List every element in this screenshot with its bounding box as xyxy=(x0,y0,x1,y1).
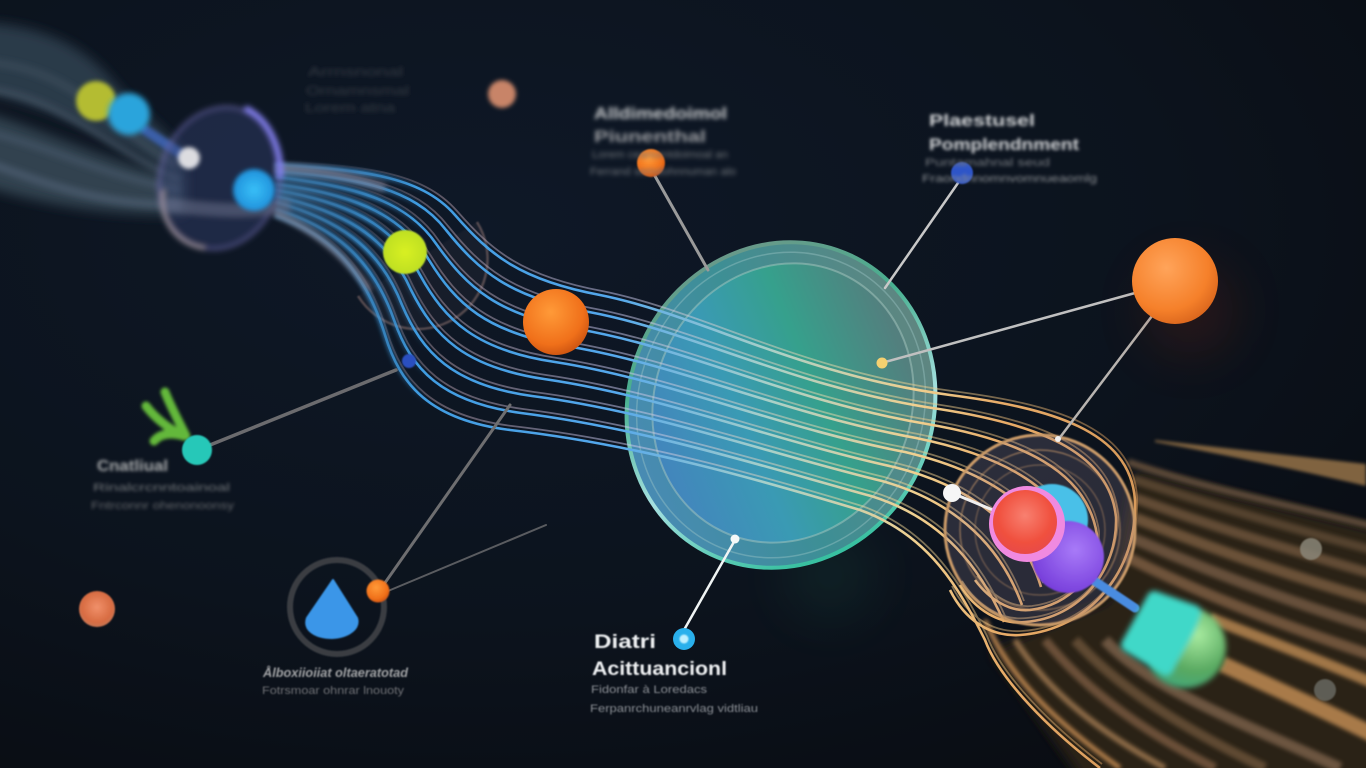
node: blue top right xyxy=(951,162,973,184)
flow strands xyxy=(275,161,1137,768)
text block: bottom label: Acittuancionl xyxy=(592,659,727,680)
text block: top centre label: Piunenthal xyxy=(594,127,706,146)
node: blue on bubble xyxy=(233,169,275,211)
text block: left label: Fntrconnr ohenonoonsy xyxy=(91,500,235,512)
text block: top right label: Puntamahnal seud xyxy=(925,157,1050,169)
blur over strands near the left bubble xyxy=(275,168,385,290)
text block: faint top left label: Arrnsnonal xyxy=(308,64,403,79)
text block: lower left label: Fotrsmoar ohnrar lnouoty xyxy=(262,685,405,697)
text block: top right label xyxy=(922,111,1097,185)
node: blurred yellow xyxy=(76,81,116,121)
node: blurred blue xyxy=(108,93,150,135)
text block: bottom label xyxy=(590,632,758,715)
cluster: spheres xyxy=(989,484,1104,593)
text block: left label: Rinalcrcnntoainoal xyxy=(93,482,230,494)
text block: bottom label: Diatri xyxy=(594,632,656,653)
node: grey dot upper xyxy=(1300,538,1322,560)
icon: teal cube and green sphere xyxy=(1128,598,1226,688)
right ring around cluster xyxy=(945,435,1135,625)
node: small blue on flow xyxy=(402,354,416,368)
node: peach blurred top xyxy=(488,80,516,108)
tapered top streak xyxy=(1155,440,1366,486)
sphere: orange large xyxy=(1132,238,1235,355)
text block: faint top left label: Ornamnsmal xyxy=(306,83,409,98)
text block: left label: Cnatliual xyxy=(97,458,168,475)
node: white on bubble xyxy=(178,147,200,169)
panel: central glass disc xyxy=(574,191,988,620)
node: disc yellow dot xyxy=(876,358,888,368)
text block: top right label: Pomplendnment xyxy=(929,135,1079,154)
text block: top centre label: Ferrand semdohnnuman alo xyxy=(590,166,736,178)
node: grey dot lower xyxy=(1314,679,1336,701)
sphere: orange mid xyxy=(523,289,589,355)
node: ring white dot xyxy=(1055,436,1061,442)
sphere: lime xyxy=(383,230,427,274)
text block: top right label: Fraondnnomnvomnueaomlg xyxy=(922,173,1097,185)
node: teal xyxy=(182,435,212,465)
connector lines xyxy=(145,130,1152,630)
text block: top centre label: Lorem ceanumtdoimoal an xyxy=(592,149,728,161)
text block: bottom label: Ferpanrchuneanrvlag vidtliau xyxy=(590,703,758,715)
text block: bottom label: Fidonfar à Loredacs xyxy=(591,684,708,696)
text block: top centre label: Alldimedoimol xyxy=(594,104,727,123)
icon: green plant xyxy=(146,392,186,441)
text block: lower left label: Ålboxiioiiat oltaeratotad xyxy=(262,665,409,680)
text block: lower left label xyxy=(262,665,409,697)
node: cyan bottom xyxy=(673,628,695,650)
node: orange top xyxy=(637,149,665,177)
left glass bubble xyxy=(141,91,299,265)
text block: faint top left label xyxy=(305,64,409,115)
node: peach lower left xyxy=(79,591,115,627)
text block: top right label: Plaestusel xyxy=(929,111,1035,130)
small lens ring on flow xyxy=(358,222,488,329)
text block: faint top left label: Lorem atna xyxy=(305,100,396,115)
text block: left label xyxy=(91,458,235,512)
brown streaks, lower right xyxy=(985,440,1366,768)
blurred left flow bands xyxy=(0,22,185,214)
node: white at ring xyxy=(943,484,961,502)
text block: top centre label xyxy=(590,104,736,178)
node: disc white dot xyxy=(730,534,740,544)
icon: water drop in ring xyxy=(290,560,384,654)
node: orange on ring xyxy=(366,580,390,602)
